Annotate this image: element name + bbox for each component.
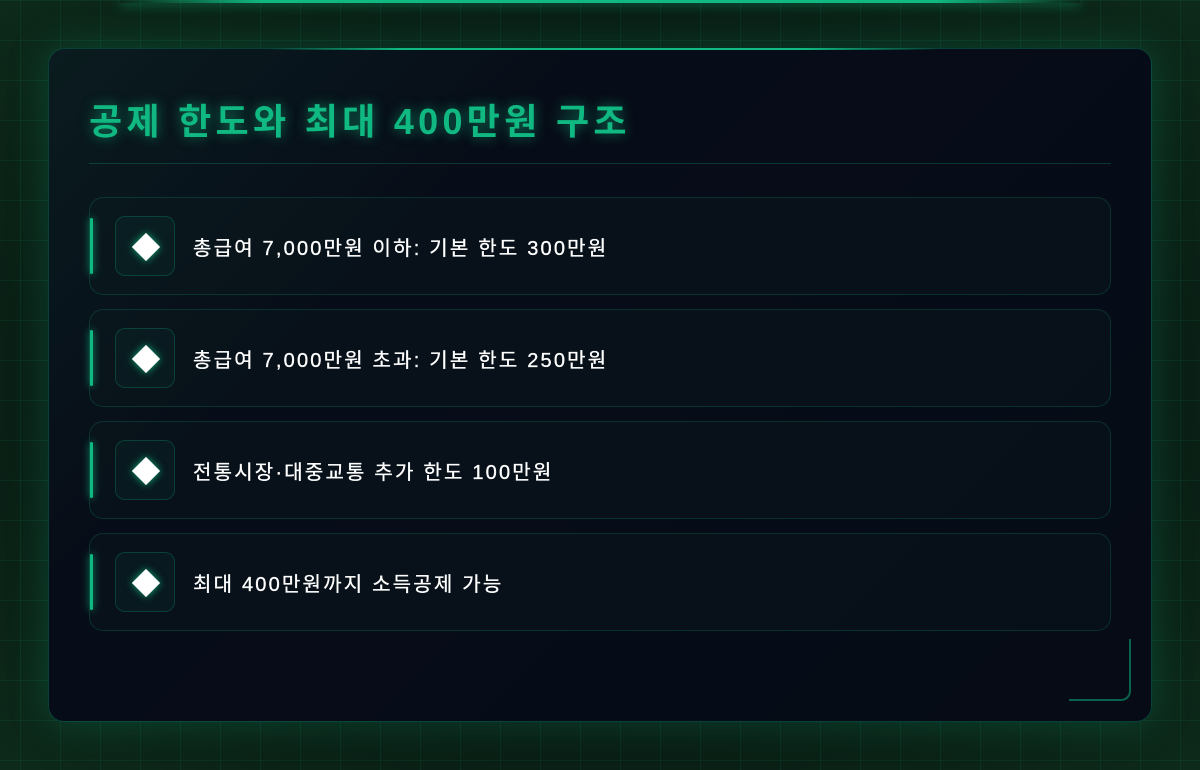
item 2: 총급여 7,000만원 초과: 기본 한도 250만원 bbox=[193, 350, 608, 372]
item 4 bbox=[89, 533, 1111, 631]
item 2 bbox=[89, 309, 1111, 407]
item 3 bbox=[89, 421, 1111, 519]
corner accent bbox=[1069, 639, 1131, 701]
item 1: 총급여 7,000만원 이하: 기본 한도 300만원 bbox=[193, 238, 608, 260]
item 3: 전통시장·대중교통 추가 한도 100만원 bbox=[193, 462, 554, 484]
item 1 bbox=[89, 197, 1111, 295]
title: 공제 한도와 최대 400만원 구조 bbox=[89, 101, 631, 142]
item 4: 최대 400만원까지 소득공제 가능 bbox=[193, 574, 503, 596]
